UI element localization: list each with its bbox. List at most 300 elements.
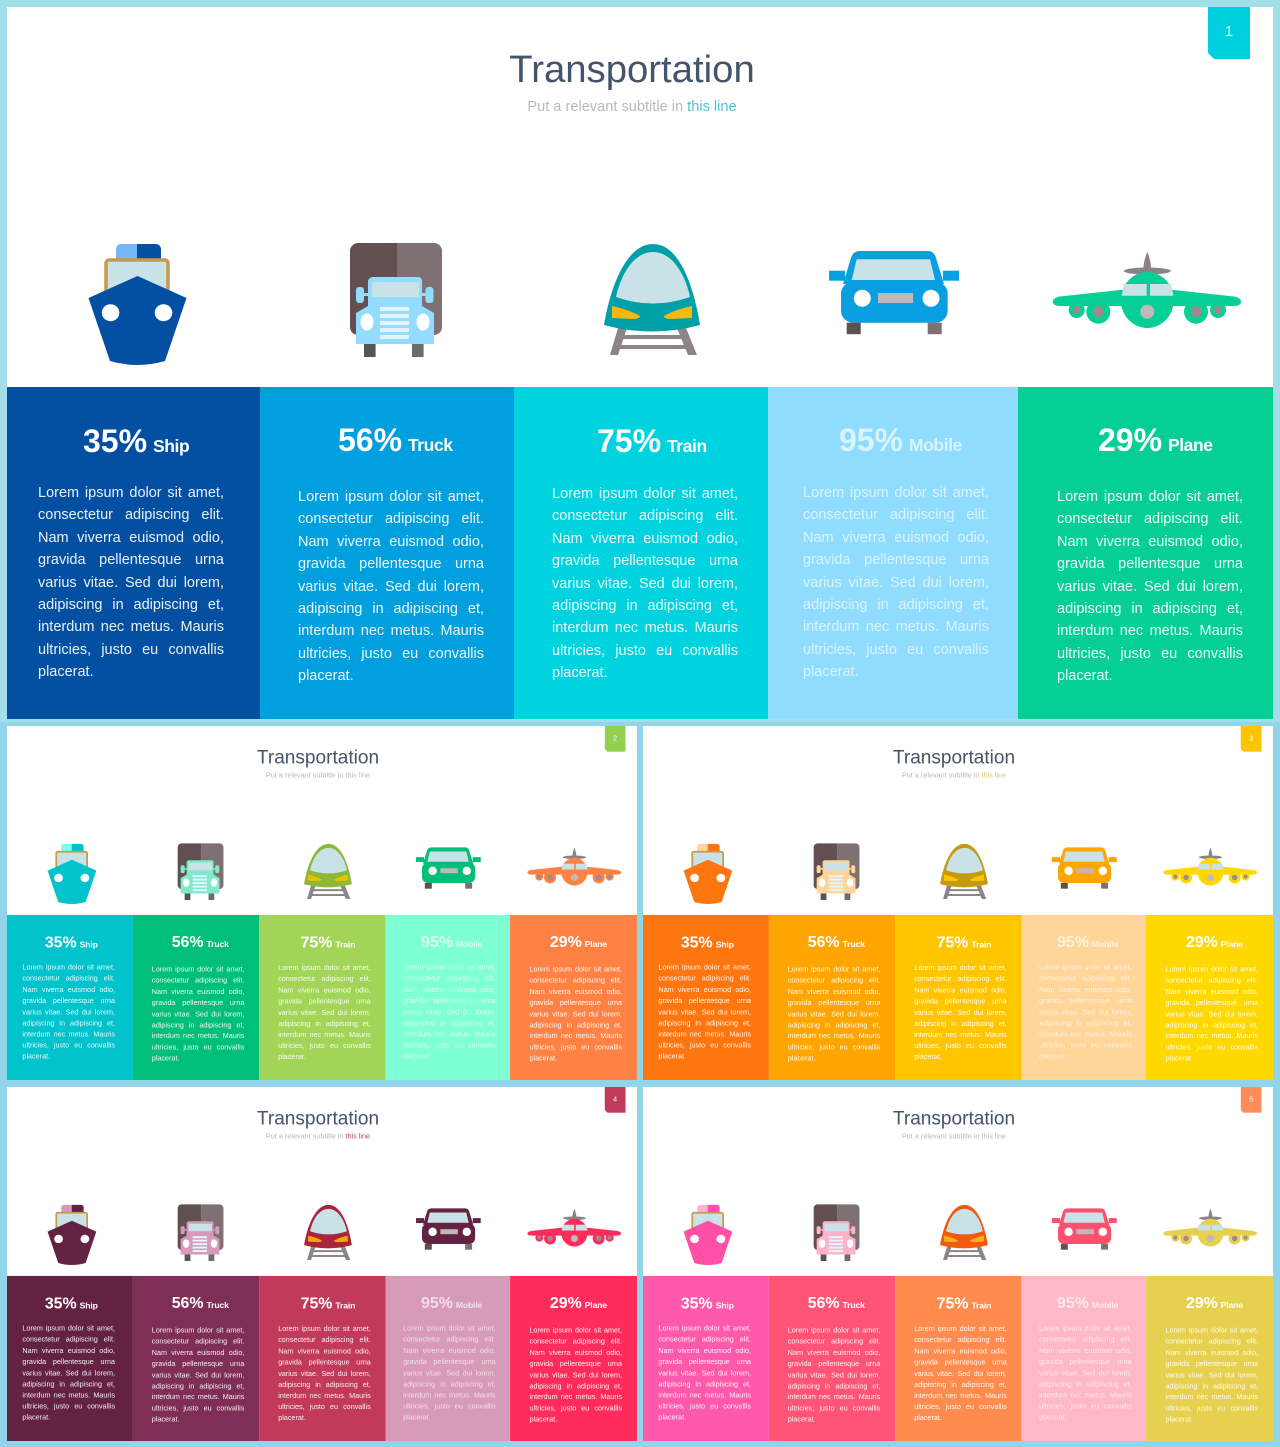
text: mobile [403, 1323, 496, 1423]
text: train: consectetur adipiscing elit. [914, 1336, 1007, 1344]
text: truck: placerat. [152, 1055, 179, 1063]
text: truck: Nam viverra euismod odio, [788, 1349, 880, 1357]
stat: 75% train: 75% Train [301, 933, 355, 951]
text: mobile: ultricies, justo eu convallis [403, 1403, 496, 1411]
text: plane: placerat. [1165, 1416, 1193, 1424]
text: ship: varius vitae. Sed dui lorem, [658, 1369, 751, 1377]
text: truck: varius vitae. Sed dui lorem, [298, 579, 484, 595]
text: mobile: Nam viverra euismod odio, [403, 986, 496, 994]
stat: 56% truck: 56% Truck [338, 422, 453, 458]
subtitle: Put a relevant subtitle in this line [527, 99, 737, 115]
text: train: gravida pellentesque urna [914, 998, 1007, 1006]
panel: orange variant slide [643, 726, 1273, 1080]
text: truck: Nam viverra euismod odio, [152, 988, 244, 996]
icon: plane [1163, 848, 1257, 886]
text: truck: interdum nec metus. Mauris [152, 1393, 244, 1401]
text: truck: varius vitae. Sed dui lorem, [152, 1010, 244, 1018]
title: Transportation [509, 48, 755, 91]
icons row [48, 843, 621, 904]
text: train: placerat. [914, 1053, 942, 1061]
text: mobile: varius vitae. Sed dui lorem, [803, 575, 989, 591]
text: mobile: placerat. [403, 1053, 431, 1061]
text: ship: ultricies, justo eu convallis [22, 1042, 115, 1050]
text: plane: Nam viverra euismod odio, [529, 988, 622, 996]
text: truck: Lorem ipsum dolor sit amet, [788, 1327, 880, 1335]
text: truck: ultricies, justo eu convallis [298, 646, 484, 662]
icon: truck [814, 1204, 859, 1261]
text: plane: interdum nec metus. Mauris [1057, 623, 1243, 639]
text: ship: placerat. [658, 1414, 686, 1422]
text: train: placerat. [278, 1053, 306, 1061]
text: train: ultricies, justo eu convallis [914, 1403, 1007, 1411]
text: truck [152, 966, 244, 1063]
icon: train [304, 1205, 352, 1260]
text: train: adipiscing in adipiscing et, [552, 598, 738, 614]
subtitle: Put a relevant subtitle in this line [266, 1133, 370, 1141]
stat: 35% ship: 35% Ship [83, 423, 189, 459]
text: mobile: gravida pellentesque urna [803, 552, 989, 568]
text: train: ultricies, justo eu convallis [552, 643, 738, 659]
text: mobile: Lorem ipsum dolor sit amet, [403, 1325, 496, 1333]
text: plane: consectetur adipiscing elit. [1165, 977, 1258, 985]
text: ship: interdum nec metus. Mauris [38, 619, 224, 635]
text: train [914, 1324, 1007, 1424]
text: train: Lorem ipsum dolor sit amet, [278, 1325, 371, 1333]
text: plane: ultricies, justo eu convallis [529, 1044, 622, 1052]
text: truck: consectetur adipiscing elit. [152, 1338, 244, 1346]
text: plane: adipiscing in adipiscing et, [1057, 601, 1243, 617]
text: plane: varius vitae. Sed dui lorem, [1057, 579, 1243, 595]
title: Transportation [257, 746, 379, 768]
text: plane: interdum nec metus. Mauris [1165, 1032, 1258, 1040]
text: ship: varius vitae. Sed dui lorem, [658, 1008, 751, 1016]
text: train: Lorem ipsum dolor sit amet, [914, 964, 1007, 972]
text: truck: interdum nec metus. Mauris [788, 1032, 880, 1040]
stat: 35% ship: 35% Ship [45, 933, 98, 951]
page number tab [1241, 1087, 1262, 1113]
text: ship: Lorem ipsum dolor sit amet, [38, 485, 224, 501]
text: ship: Lorem ipsum dolor sit amet, [22, 1325, 115, 1333]
text: truck: Lorem ipsum dolor sit amet, [152, 966, 244, 974]
column: ship [7, 387, 260, 719]
icon: plane [527, 848, 621, 886]
text: train: varius vitae. Sed dui lorem, [552, 576, 738, 592]
text: ship: consectetur adipiscing elit. [22, 1336, 115, 1344]
icon: car [829, 251, 959, 334]
column: ship [643, 915, 769, 1080]
stat: 35% ship: 35% Ship [681, 1294, 734, 1312]
subtitle: Put a relevant subtitle in this line [902, 1133, 1006, 1141]
column: mobile [386, 1276, 510, 1441]
text: ship: Nam viverra euismod odio, [22, 1347, 115, 1355]
column: plane [1146, 1276, 1273, 1441]
text: plane: gravida pellentesque urna [529, 999, 622, 1007]
column: plane [1018, 387, 1273, 719]
text: train: ultricies, justo eu convallis [278, 1042, 371, 1050]
text: truck: varius vitae. Sed dui lorem, [152, 1371, 244, 1379]
text: ship: ultricies, justo eu convallis [22, 1403, 115, 1411]
text: train: Nam viverra euismod odio, [278, 1347, 371, 1355]
text: mobile: varius vitae. Sed dui lorem, [403, 1369, 496, 1377]
text: truck: varius vitae. Sed dui lorem, [788, 1371, 880, 1379]
text: plane: ultricies, justo eu convallis [1165, 1044, 1258, 1052]
text: train: consectetur adipiscing elit. [278, 975, 371, 983]
text: ship: placerat. [38, 664, 94, 680]
text: mobile: gravida pellentesque urna [403, 1358, 496, 1366]
text: train [278, 1324, 371, 1424]
text: ship: adipiscing in adipiscing et, [658, 1380, 751, 1388]
text: truck: ultricies, justo eu convallis [152, 1044, 244, 1052]
icon: truck [178, 843, 223, 900]
text: train: gravida pellentesque urna [914, 1359, 1007, 1367]
text: ship: ultricies, justo eu convallis [658, 1403, 751, 1411]
text: plane [1165, 1325, 1258, 1425]
column: train [895, 1276, 1022, 1441]
text: ship: varius vitae. Sed dui lorem, [22, 1008, 115, 1016]
text: mobile [1039, 1323, 1132, 1423]
text: truck: ultricies, justo eu convallis [152, 1405, 244, 1413]
text: plane: ultricies, justo eu convallis [529, 1405, 622, 1413]
text: truck [152, 1325, 244, 1425]
stat: 56% truck: 56% Truck [172, 1293, 229, 1311]
text: ship: adipiscing in adipiscing et, [22, 1019, 115, 1027]
text: truck: gravida pellentesque urna [788, 999, 880, 1007]
text: train: varius vitae. Sed dui lorem, [914, 1009, 1007, 1017]
text: plane [529, 1325, 622, 1425]
stat: 95% mobile: 95% Mobile [421, 1293, 482, 1311]
text: truck: adipiscing in adipiscing et, [298, 601, 484, 617]
text: truck: gravida pellentesque urna [298, 556, 484, 572]
text: mobile: consectetur adipiscing elit. [1039, 1336, 1132, 1344]
icon: train [940, 1205, 988, 1260]
column: truck [133, 915, 259, 1080]
text: plane: varius vitae. Sed dui lorem, [529, 1010, 622, 1018]
text: train: adipiscing in adipiscing et, [278, 1381, 371, 1389]
text: train: adipiscing in adipiscing et, [278, 1020, 371, 1028]
text: ship [22, 1325, 115, 1422]
page number tab [1241, 726, 1262, 752]
stat: 95% mobile: 95% Mobile [839, 422, 962, 458]
icon: truck [178, 1204, 223, 1261]
text: ship [22, 964, 115, 1061]
text: truck: varius vitae. Sed dui lorem, [788, 1010, 880, 1018]
page number tab: 5 [1249, 1095, 1253, 1103]
text: train: consectetur adipiscing elit. [552, 508, 738, 524]
text: ship: gravida pellentesque urna [22, 997, 115, 1005]
text: mobile: ultricies, justo eu convallis [1039, 1403, 1132, 1411]
text: truck: interdum nec metus. Mauris [152, 1032, 244, 1040]
text: mobile [403, 964, 496, 1061]
stat: 29% plane: 29% Plane [1186, 932, 1243, 950]
text: train: Lorem ipsum dolor sit amet, [278, 964, 371, 972]
text: train: adipiscing in adipiscing et, [914, 1020, 1007, 1028]
text: truck: adipiscing in adipiscing et, [152, 1021, 244, 1029]
text: ship: adipiscing in adipiscing et, [38, 597, 224, 613]
stat: 75% train: 75% Train [937, 1294, 991, 1312]
text: truck: consectetur adipiscing elit. [788, 977, 880, 985]
text: train: ultricies, justo eu convallis [914, 1042, 1007, 1050]
text: ship: consectetur adipiscing elit. [658, 975, 751, 983]
text: train: interdum nec metus. Mauris [914, 1392, 1007, 1400]
text: plane: consectetur adipiscing elit. [1057, 511, 1243, 527]
icon: ship [48, 1205, 96, 1265]
text: train: adipiscing in adipiscing et, [914, 1381, 1007, 1389]
text: plane: varius vitae. Sed dui lorem, [1165, 1371, 1258, 1379]
text: train: gravida pellentesque urna [552, 553, 738, 569]
text: truck: gravida pellentesque urna [152, 999, 244, 1007]
column: ship [7, 1276, 133, 1441]
column: train [259, 1276, 386, 1441]
text: plane: Lorem ipsum dolor sit amet, [1165, 1327, 1258, 1335]
text: ship: ultricies, justo eu convallis [38, 642, 224, 658]
text: mobile: Lorem ipsum dolor sit amet, [1039, 964, 1132, 972]
text: plane: consectetur adipiscing elit. [529, 977, 622, 985]
text: train: interdum nec metus. Mauris [278, 1031, 371, 1039]
text: train [552, 486, 738, 681]
text: train: Nam viverra euismod odio, [552, 531, 738, 547]
icon: ship [88, 244, 186, 365]
icon: truck [814, 843, 859, 900]
text: plane: ultricies, justo eu convallis [1165, 1405, 1258, 1413]
text: mobile: interdum nec metus. Mauris [403, 1031, 496, 1038]
panel: main slide [7, 7, 1273, 719]
column: truck [769, 915, 895, 1080]
icon: car [416, 847, 481, 889]
text: mobile: Lorem ipsum dolor sit amet, [403, 964, 496, 972]
icon: train [604, 244, 700, 355]
text: train: placerat. [278, 1414, 306, 1422]
text: truck: placerat. [788, 1416, 815, 1424]
text: train: Nam viverra euismod odio, [914, 986, 1007, 994]
text: ship: ultricies, justo eu convallis [658, 1042, 751, 1050]
stat: 29% plane: 29% Plane [1186, 1293, 1243, 1311]
text: ship: consectetur adipiscing elit. [22, 975, 115, 983]
text: mobile: varius vitae. Sed dui lorem, [1039, 1369, 1132, 1377]
text: plane: gravida pellentesque urna [1165, 1360, 1258, 1368]
text: mobile: placerat. [403, 1414, 431, 1422]
text: plane: gravida pellentesque urna [529, 1360, 622, 1368]
text: mobile: interdum nec metus. Mauris [803, 619, 989, 635]
text: train: varius vitae. Sed dui lorem, [278, 1370, 371, 1378]
column: truck [133, 1276, 259, 1441]
text: plane: Nam viverra euismod odio, [529, 1349, 622, 1357]
column: ship [7, 915, 133, 1080]
icon: car [416, 1208, 481, 1250]
text: train: Nam viverra euismod odio, [278, 986, 371, 994]
stat: 35% ship: 35% Ship [45, 1294, 98, 1312]
text: plane: ultricies, justo eu convallis [1057, 646, 1243, 662]
page number tab [605, 1087, 626, 1113]
text: train: interdum nec metus. Mauris [914, 1031, 1007, 1039]
text: mobile: consectetur adipiscing elit. [803, 507, 989, 523]
text: mobile: consectetur adipiscing elit. [403, 975, 496, 983]
icon: train [940, 844, 988, 899]
icon: ship [684, 1205, 732, 1265]
text: plane: adipiscing in adipiscing et, [529, 1021, 622, 1029]
text: train: consectetur adipiscing elit. [914, 975, 1007, 983]
text: ship: interdum nec metus. Mauris [658, 1392, 751, 1399]
text: mobile: ultricies, justo eu convallis [1039, 1042, 1132, 1050]
text: mobile: interdum nec metus. Mauris [1039, 1031, 1132, 1038]
text: mobile: Nam viverra euismod odio, [1039, 1347, 1132, 1355]
text: train: gravida pellentesque urna [278, 1359, 371, 1367]
stat: 75% train: 75% Train [937, 933, 991, 951]
icon: truck [350, 243, 442, 357]
text: mobile: Lorem ipsum dolor sit amet, [1039, 1325, 1132, 1333]
column: truck [260, 387, 514, 719]
text: ship: Nam viverra euismod odio, [658, 986, 751, 994]
page number tab: 1 [1225, 23, 1233, 40]
text: mobile: adipiscing in adipiscing et, [1039, 1380, 1132, 1388]
text: ship: Lorem ipsum dolor sit amet, [22, 964, 115, 972]
text: truck: placerat. [298, 668, 354, 684]
text: ship: placerat. [22, 1414, 50, 1422]
text: plane [1057, 489, 1243, 684]
text: ship: Nam viverra euismod odio, [22, 986, 115, 994]
text: truck: placerat. [152, 1416, 179, 1424]
text: truck: adipiscing in adipiscing et, [152, 1382, 244, 1390]
text: train: consectetur adipiscing elit. [278, 1336, 371, 1344]
text: ship: Lorem ipsum dolor sit amet, [658, 1325, 751, 1333]
text: train: Lorem ipsum dolor sit amet, [914, 1325, 1007, 1333]
text: ship: consectetur adipiscing elit. [658, 1336, 751, 1344]
text: truck: gravida pellentesque urna [152, 1360, 244, 1368]
icon: car [1052, 847, 1117, 889]
text: plane: varius vitae. Sed dui lorem, [529, 1371, 622, 1379]
text: truck: gravida pellentesque urna [788, 1360, 880, 1368]
icon: car [1052, 1208, 1117, 1250]
icons row [643, 1087, 1273, 1276]
text: mobile: ultricies, justo eu convallis [403, 1042, 496, 1050]
text: train: interdum nec metus. Mauris [278, 1392, 371, 1400]
icon: train [304, 844, 352, 899]
text: ship [658, 964, 751, 1061]
text: plane: gravida pellentesque urna [1057, 556, 1243, 572]
stat: 95% mobile: 95% Mobile [421, 932, 482, 950]
title: Transportation [257, 1107, 379, 1129]
column: train [259, 915, 386, 1080]
text: ship: interdum nec metus. Mauris [658, 1031, 751, 1038]
text: mobile: interdum nec metus. Mauris [1039, 1392, 1132, 1399]
column: plane [1146, 915, 1273, 1080]
stat: 29% plane: 29% Plane [550, 1293, 607, 1311]
text: ship [658, 1323, 751, 1423]
text: plane [529, 966, 622, 1063]
text: truck: ultricies, justo eu convallis [788, 1405, 880, 1413]
text: ship: gravida pellentesque urna [22, 1358, 115, 1366]
text: train: Lorem ipsum dolor sit amet, [552, 486, 738, 502]
text: ship: adipiscing in adipiscing et, [22, 1380, 115, 1388]
panel: burgundy variant slide [7, 1087, 637, 1441]
stat: 75% train: 75% Train [301, 1294, 355, 1312]
text: mobile: gravida pellentesque urna [403, 997, 496, 1005]
text: plane: interdum nec metus. Mauris [529, 1393, 622, 1401]
text: ship: gravida pellentesque urna [38, 552, 224, 568]
text: plane: Lorem ipsum dolor sit amet, [529, 1327, 622, 1335]
text: truck: interdum nec metus. Mauris [788, 1393, 880, 1401]
text: plane: Lorem ipsum dolor sit amet, [1057, 489, 1243, 505]
text: truck: Lorem ipsum dolor sit amet, [298, 489, 484, 505]
column: mobile [768, 387, 1018, 719]
text: plane: adipiscing in adipiscing et, [1165, 1382, 1258, 1390]
text: plane: adipiscing in adipiscing et, [529, 1382, 622, 1390]
text: mobile: Lorem ipsum dolor sit amet, [803, 485, 989, 501]
text: plane: varius vitae. Sed dui lorem, [1165, 1010, 1258, 1018]
text: truck [298, 489, 484, 684]
column: truck [769, 1276, 895, 1441]
text: mobile: adipiscing in adipiscing et, [1039, 1019, 1132, 1027]
text: truck: Lorem ipsum dolor sit amet, [152, 1327, 244, 1335]
text: mobile: adipiscing in adipiscing et, [403, 1380, 496, 1388]
subtitle: Put a relevant subtitle in this line [266, 772, 370, 780]
text: train: ultricies, justo eu convallis [278, 1403, 371, 1411]
page number tab: 2 [613, 734, 617, 742]
stat: 56% truck: 56% Truck [172, 932, 229, 950]
text: ship: Lorem ipsum dolor sit amet, [658, 964, 751, 972]
text: train: interdum nec metus. Mauris [552, 620, 738, 636]
text: ship: placerat. [658, 1053, 686, 1061]
text: ship: consectetur adipiscing elit. [38, 507, 224, 523]
icon: ship [684, 844, 732, 904]
icons row [684, 843, 1257, 904]
text: plane: consectetur adipiscing elit. [1165, 1338, 1258, 1346]
text: plane: Nam viverra euismod odio, [1165, 1349, 1258, 1357]
text: mobile: gravida pellentesque urna [1039, 1358, 1132, 1366]
text: mobile: varius vitae. Sed dui lorem, [403, 1008, 496, 1016]
icons row [88, 243, 1241, 365]
icon: plane [1163, 1209, 1257, 1247]
text: truck: placerat. [788, 1055, 815, 1063]
page number tab [1208, 7, 1250, 59]
column: train [895, 915, 1022, 1080]
text: plane: placerat. [1057, 668, 1113, 684]
column: ship [643, 1276, 769, 1441]
stat: 95% mobile: 95% Mobile [1057, 932, 1118, 950]
text: mobile [803, 485, 989, 680]
panel: green variant slide [7, 726, 637, 1080]
text: plane: placerat. [529, 1055, 557, 1063]
text: train [914, 964, 1007, 1061]
text: mobile: adipiscing in adipiscing et, [803, 597, 989, 613]
text: mobile: adipiscing in adipiscing et, [403, 1019, 496, 1027]
text: mobile [1039, 964, 1132, 1061]
page number tab: 3 [1249, 734, 1253, 742]
text: mobile: Nam viverra euismod odio, [803, 530, 989, 546]
text: truck: ultricies, justo eu convallis [788, 1044, 880, 1052]
text: train: placerat. [552, 665, 608, 681]
text: plane: interdum nec metus. Mauris [529, 1032, 622, 1040]
text: plane: Lorem ipsum dolor sit amet, [529, 966, 622, 974]
text: plane: adipiscing in adipiscing et, [1165, 1021, 1258, 1029]
text: ship: adipiscing in adipiscing et, [658, 1019, 751, 1027]
title: Transportation [893, 746, 1015, 768]
text: mobile: Nam viverra euismod odio, [1039, 986, 1132, 994]
text: truck [788, 1325, 880, 1425]
column: mobile [1022, 1276, 1146, 1441]
text: truck: Nam viverra euismod odio, [152, 1349, 244, 1357]
text: mobile: placerat. [803, 664, 859, 680]
text: train: Nam viverra euismod odio, [914, 1347, 1007, 1355]
text: mobile: interdum nec metus. Mauris [403, 1392, 496, 1399]
text: mobile: placerat. [1039, 1053, 1067, 1061]
text: ship [38, 485, 224, 680]
text: truck: adipiscing in adipiscing et, [788, 1382, 880, 1390]
text: mobile: placerat. [1039, 1414, 1067, 1422]
stat: 35% ship: 35% Ship [681, 933, 734, 951]
text: truck: consectetur adipiscing elit. [298, 511, 484, 527]
stat: 95% mobile: 95% Mobile [1057, 1293, 1118, 1311]
text: ship: Nam viverra euismod odio, [38, 530, 224, 546]
